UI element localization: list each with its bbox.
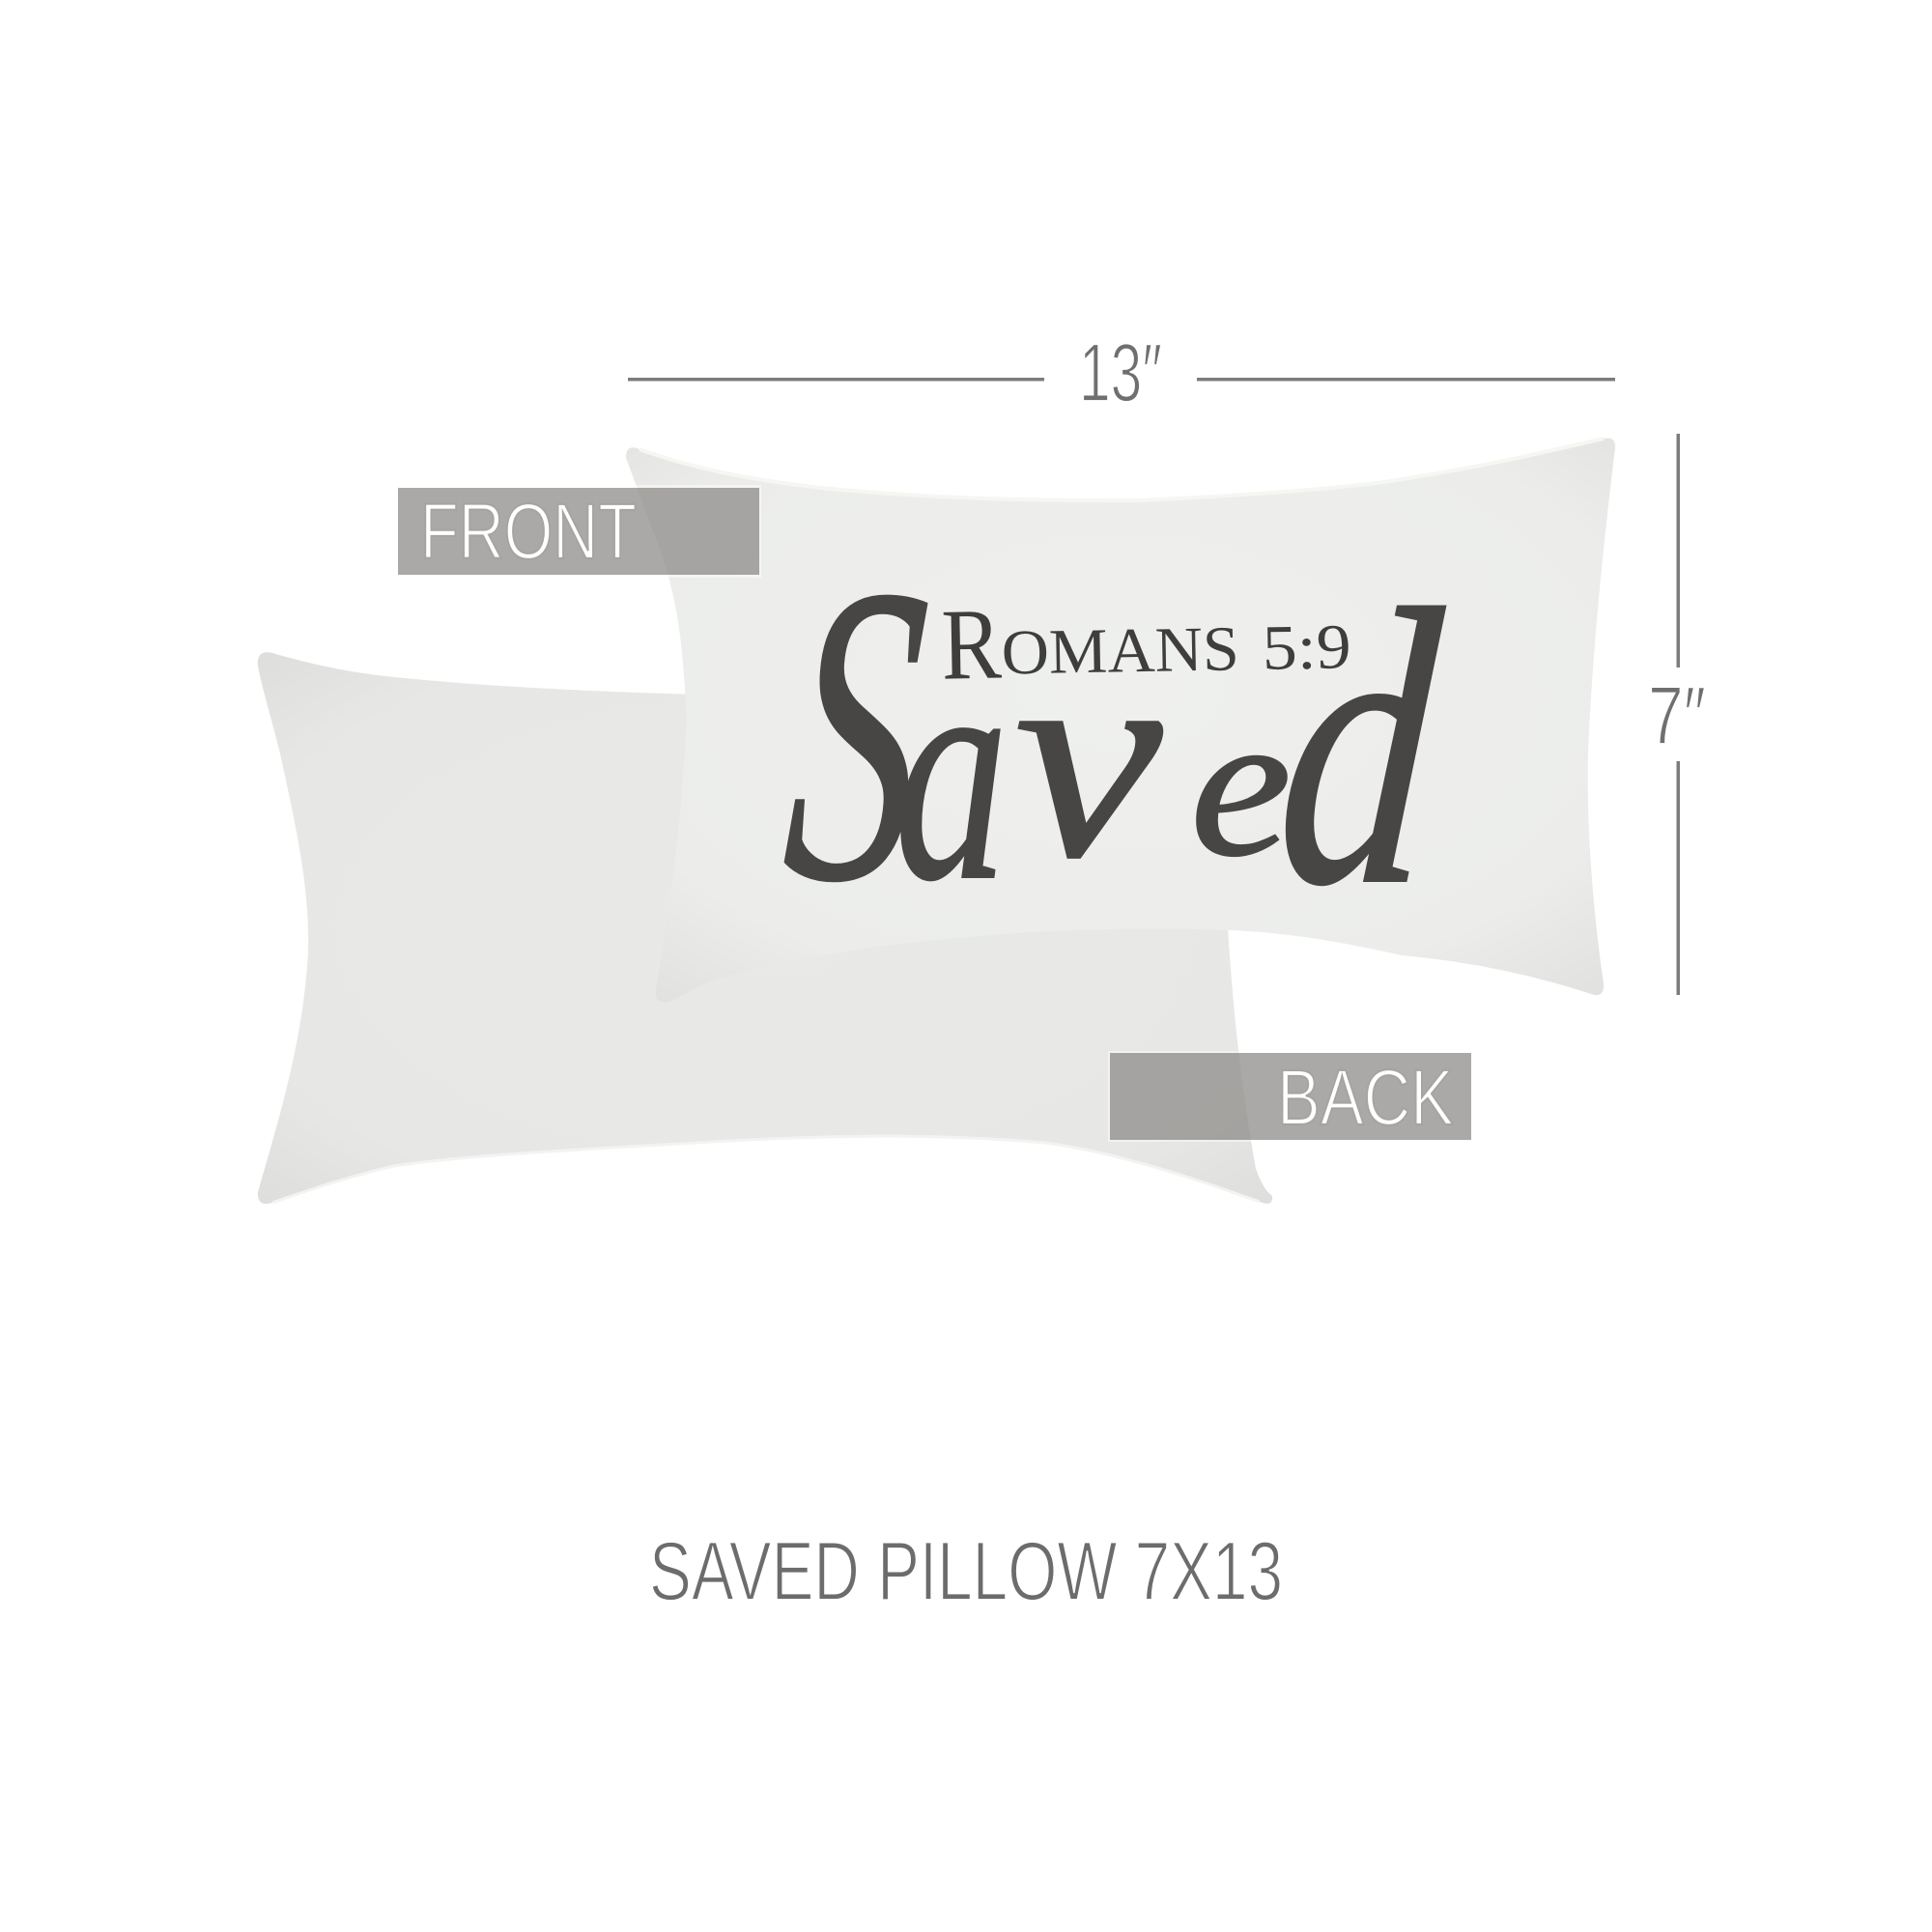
pillow text: Saved script: e: [1190, 669, 1292, 899]
dimension: height 7 inches: [1648, 434, 1706, 995]
label: front: FRONT: [420, 488, 637, 576]
product title: SAVED PILLOW 7X13: [649, 1525, 1283, 1618]
pillow: front: [626, 438, 1615, 1003]
pillow text: Romans 5:9: R: [941, 587, 1003, 701]
pillow text: Saved script: S: [774, 499, 939, 970]
dimension: width 13 inches: [628, 327, 1615, 419]
pillow text: Romans 5:9: 5:9: [1262, 611, 1351, 684]
pillow text: Saved script: a: [895, 595, 1009, 946]
pillow text: Saved script: d: [1267, 528, 1455, 968]
pillow: back: [258, 652, 1272, 1204]
pillow text: Romans 5:9: OMANS: [1001, 613, 1239, 688]
pillow text: Saved script: [774, 499, 1455, 970]
label: back: [1108, 1051, 1474, 1142]
label: back: BACK: [1277, 1054, 1454, 1142]
dimension: width 13 inches: 13″: [1079, 327, 1162, 419]
dimension: height 7 inches: 7″: [1648, 670, 1706, 762]
pillow text: Saved script: v: [1014, 597, 1165, 918]
pillow text: Romans 5:9: [941, 581, 1352, 701]
